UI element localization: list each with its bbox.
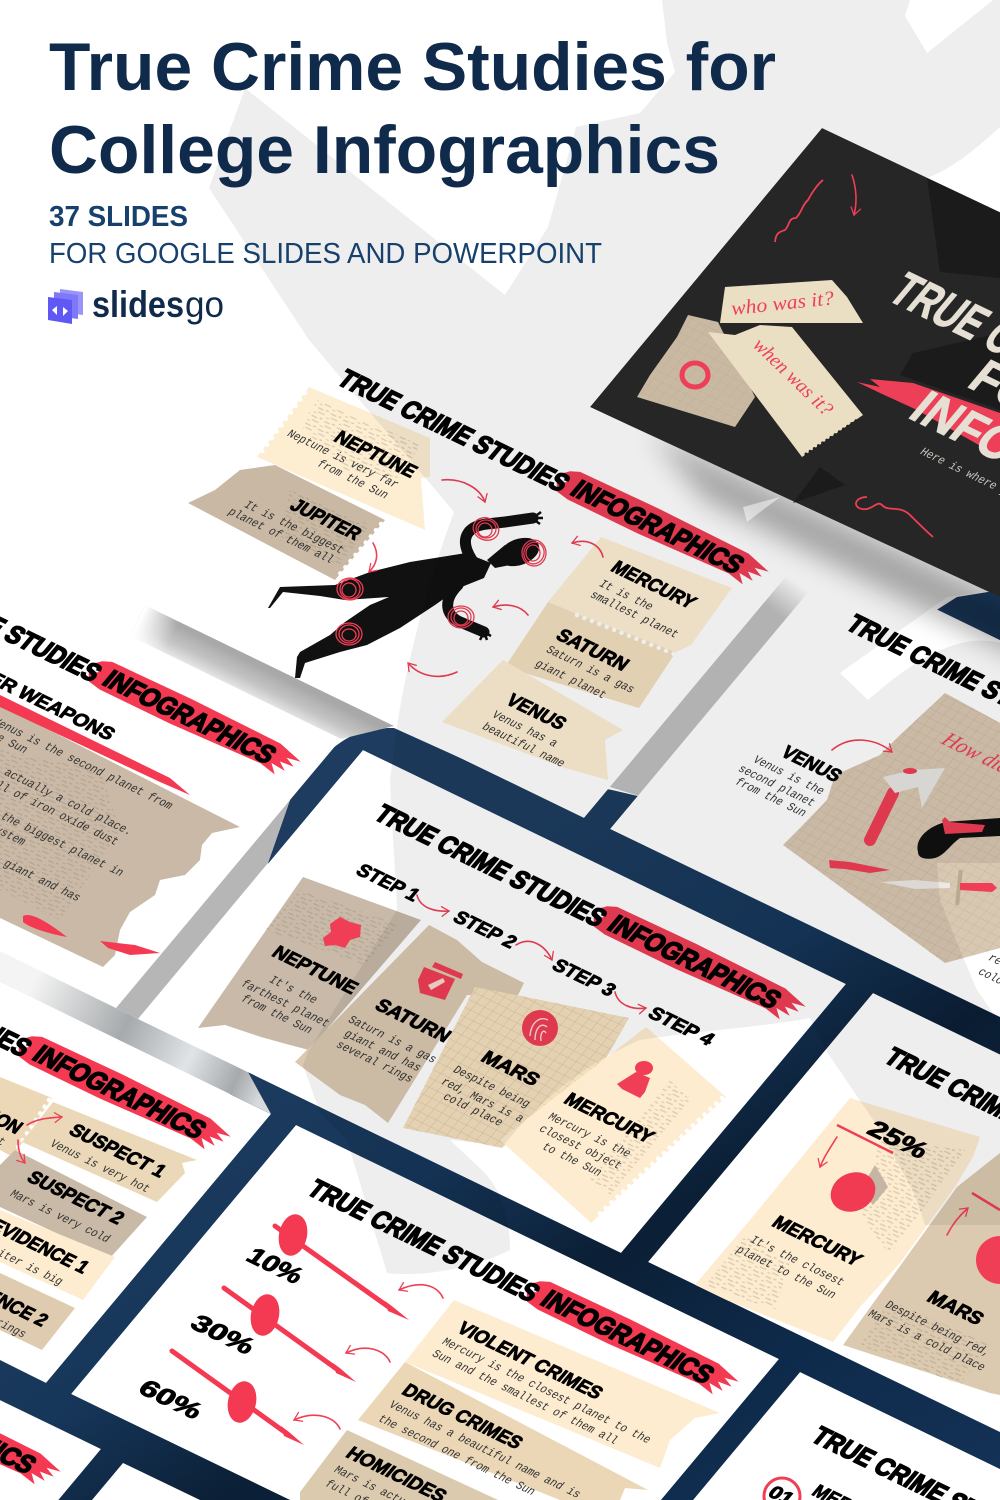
slide: suspects and evidence xyxy=(0,926,271,1383)
main title: True Crime Studies for xyxy=(49,29,776,105)
text block: Venus: from the Sun xyxy=(731,776,809,820)
red underline xyxy=(0,695,190,795)
body text xyxy=(0,716,176,905)
card: suspect 2: Mars is very cold xyxy=(6,1188,113,1246)
card: suspect 1: SUSPECT 1 xyxy=(65,1120,171,1181)
card: drug crimes xyxy=(358,1362,648,1500)
torn paper card xyxy=(0,705,240,967)
step labels xyxy=(352,860,719,1049)
card: Mars xyxy=(843,1153,1000,1395)
card: Mars: Mars is a cold place xyxy=(864,1308,988,1374)
card: Mars: Despite being red, xyxy=(881,1299,994,1360)
card: Mercury: Mercury is the xyxy=(544,1111,634,1161)
clipped text fragment xyxy=(978,954,1000,984)
slide: percentage sliders xyxy=(71,1125,779,1500)
card: Neptune: from the Sun xyxy=(313,458,391,502)
scribble circle: elbow xyxy=(472,517,500,541)
text block: Venus: VENUS xyxy=(777,742,846,786)
card: drug crimes: DRUG CRIMES xyxy=(398,1380,527,1453)
card: Mercury: MERCURY xyxy=(768,1212,867,1270)
card: Mercury: It is the xyxy=(595,578,656,614)
slider: 10% xyxy=(241,1212,409,1320)
card: Saturn xyxy=(295,925,524,1123)
cover slide: dark title slide xyxy=(590,128,1000,597)
icon: knife xyxy=(880,870,997,905)
shadow band: right of slide 2 xyxy=(607,549,835,797)
slider: 30%: 30% xyxy=(185,1309,261,1359)
slide title xyxy=(331,361,775,592)
card: Mars: MARS xyxy=(923,1287,988,1329)
card: Mercury: MERCURY xyxy=(607,557,701,612)
slide title: TRUE CRIME STUDIES xyxy=(301,1175,545,1307)
main title xyxy=(49,29,776,188)
slider: 30% xyxy=(185,1288,356,1382)
slide title: INFOGRAPHICS xyxy=(27,1041,212,1144)
card: violent crimes xyxy=(405,1300,720,1468)
card: evidence 1 xyxy=(0,1210,115,1300)
icon: axe xyxy=(870,768,945,840)
slider: 60% xyxy=(133,1351,304,1445)
step labels: STEP 2 xyxy=(449,907,521,952)
navy background shape xyxy=(0,590,1000,1500)
card: Neptune: NEPTUNE xyxy=(268,942,363,998)
card: homicides xyxy=(300,1430,511,1500)
torn note: who was it xyxy=(720,280,863,323)
torn note: grid paper xyxy=(637,315,755,427)
slide: bottom-left, title brush xyxy=(0,1365,101,1500)
slide title: TRUE CRIME STUDIES xyxy=(368,800,612,932)
card: Venus: Venus has a xyxy=(488,709,561,750)
scribble signature xyxy=(856,497,933,537)
card: Mars: red, Mars is a xyxy=(437,1076,527,1126)
slide title xyxy=(0,551,307,782)
card: Mercury: 25% xyxy=(862,1115,935,1163)
small white swoosh tip xyxy=(743,497,780,522)
slide: figure with circled wounds xyxy=(145,368,782,818)
card: suspect 2 xyxy=(0,1150,147,1258)
shadow band: below slide 6 xyxy=(0,951,271,1114)
scribble circle: knee xyxy=(337,576,363,602)
card: Mercury: It's the closest xyxy=(746,1234,847,1289)
card: Saturn: giant and has xyxy=(340,1028,424,1075)
red title brush xyxy=(857,379,1000,460)
slider: 10%: 10% xyxy=(241,1242,310,1288)
torn note: when was it: when was it? xyxy=(749,334,837,420)
card: violent crimes: Mercury is the closest planet to the xyxy=(438,1336,654,1447)
logo: slidesgo: slides xyxy=(92,284,184,325)
card: violent crimes: VIOLENT CRIMES xyxy=(453,1318,607,1403)
card: Neptune: from the Sun xyxy=(237,993,315,1037)
card: Mars xyxy=(403,987,629,1148)
icon: fingerprint xyxy=(522,1010,558,1046)
slide: weapons xyxy=(610,560,1000,1017)
step labels: STEP 3 xyxy=(548,955,620,1000)
slide title xyxy=(0,926,237,1157)
card: Neptune: It's the xyxy=(265,974,320,1007)
card: Neptune: farthest planet xyxy=(237,978,332,1030)
shadow fade: below slide 2 left xyxy=(130,605,200,668)
step arrows xyxy=(417,895,646,1008)
dark blobs xyxy=(793,178,1000,503)
slide title: TRUE CRIME STUDIES xyxy=(331,365,575,497)
card: Jupiter xyxy=(188,465,385,580)
card: Jupiter: JUPITER xyxy=(286,495,366,544)
card: Jupiter: planet of them all xyxy=(224,506,337,567)
icon: blood splat xyxy=(323,917,361,948)
card: Saturn: SATURN xyxy=(371,995,456,1046)
card: Mercury: closest object xyxy=(535,1123,625,1173)
card: Venus: VENUS xyxy=(502,690,571,733)
card: Saturn: several rings xyxy=(332,1039,416,1086)
card: Mars: MARS xyxy=(477,1047,544,1090)
card: Venus xyxy=(442,660,623,780)
card: location xyxy=(0,1077,52,1157)
slide title: INFOGRAPHICS xyxy=(565,476,750,579)
card: Saturn: Saturn is a gas xyxy=(344,1014,439,1066)
arrow to card xyxy=(832,740,892,752)
step labels: STEP 4 xyxy=(644,1003,719,1049)
card: Saturn xyxy=(505,602,676,708)
card: homicides: HOMICIDES xyxy=(342,1443,451,1500)
slide: steps timeline xyxy=(138,750,846,1253)
scribble circle: arm xyxy=(448,606,474,628)
slider: 60%: 60% xyxy=(133,1374,209,1424)
slide title: INFOGRAPHICS xyxy=(535,1286,720,1389)
silhouette of a body xyxy=(268,512,543,678)
card: suspect 1 xyxy=(22,1102,197,1202)
card: Mercury: MERCURY xyxy=(560,1089,659,1147)
arrows xyxy=(18,1117,62,1163)
card: Jupiter: It is the biggest xyxy=(240,499,347,557)
card: suspect 1: Venus is very hot xyxy=(46,1138,153,1196)
card: drug crimes: the second one from the Sun xyxy=(374,1413,538,1499)
card: drug crimes: Venus has a beautiful name and is xyxy=(385,1399,583,1500)
slide: bottom sliver xyxy=(92,1463,200,1500)
slide: percentages with cards xyxy=(648,993,1000,1432)
main title: College Infographics xyxy=(49,112,720,188)
number badge 01 xyxy=(764,1478,800,1500)
step labels: STEP 1 xyxy=(352,860,424,905)
icon: evidence jar xyxy=(418,962,463,1000)
card: Mercury xyxy=(548,537,732,652)
icon: pistol xyxy=(917,817,1000,859)
card: Neptune xyxy=(198,877,421,1050)
icon: detective xyxy=(617,1061,653,1098)
logo: slidesgo: go xyxy=(185,284,224,325)
torn note: when was it xyxy=(708,325,863,457)
torn note: who was it: who was it? xyxy=(730,287,835,320)
card: Mars: Despite being xyxy=(449,1064,533,1111)
card: Neptune: Neptune is very far xyxy=(283,428,401,491)
arrows xyxy=(369,480,603,676)
scribble circle: lower knee xyxy=(336,623,362,645)
card: Mercury: smallest planet xyxy=(586,589,681,641)
slide title: INFOGRAPHICS xyxy=(602,911,787,1014)
text block: Venus: second planet xyxy=(734,763,818,810)
scribble xyxy=(775,180,823,242)
card: Mercury: planet to the Sun xyxy=(732,1244,839,1302)
card: Mars: cold place xyxy=(439,1091,506,1129)
blood smear xyxy=(829,860,890,873)
grid paper card xyxy=(783,693,1000,963)
blood smears xyxy=(23,915,160,955)
logo: slidesgo xyxy=(48,284,224,325)
shadow band: below slide 2 xyxy=(130,605,394,739)
shadow band: right of slide 6 xyxy=(116,739,341,1019)
shadow of dark cover slide xyxy=(650,432,1000,668)
card: Mercury xyxy=(500,1027,726,1223)
card: Saturn: giant planet xyxy=(531,658,609,702)
card: Neptune: NEPTUNE xyxy=(330,427,422,481)
subtitle: platforms: FOR GOOGLE SLIDES AND POWERPOINT xyxy=(49,238,602,270)
card: violent crimes: Sun and the smallest of them all xyxy=(428,1348,621,1448)
slide title: INFOGRAPHICS xyxy=(97,666,282,769)
card: Saturn: Saturn is a gas xyxy=(542,644,637,696)
slide: numbered list xyxy=(693,1372,1000,1500)
card: Venus: beautiful name xyxy=(478,721,568,771)
slide: murder weapons xyxy=(0,551,341,1008)
text block: Venus: Venus is the xyxy=(749,754,827,798)
arrow down xyxy=(852,175,856,215)
slide title xyxy=(0,1365,67,1490)
subtitle: slide count: 37 SLIDES xyxy=(49,201,188,233)
card: evidence 2 xyxy=(0,1268,75,1350)
arrows xyxy=(294,1285,443,1429)
card: Saturn: SATURN xyxy=(552,625,634,674)
slide title xyxy=(368,796,812,1027)
watermark swoosh overlay xyxy=(209,0,1000,1274)
card: Mercury: to the Sun xyxy=(538,1141,605,1179)
card: Mercury xyxy=(693,1098,980,1342)
card: suspect 2: SUSPECT 2 xyxy=(23,1167,129,1228)
slide title xyxy=(301,1171,745,1402)
scribble circle: head xyxy=(521,539,547,567)
card: Neptune xyxy=(257,387,430,530)
text block: Venus xyxy=(736,744,842,816)
